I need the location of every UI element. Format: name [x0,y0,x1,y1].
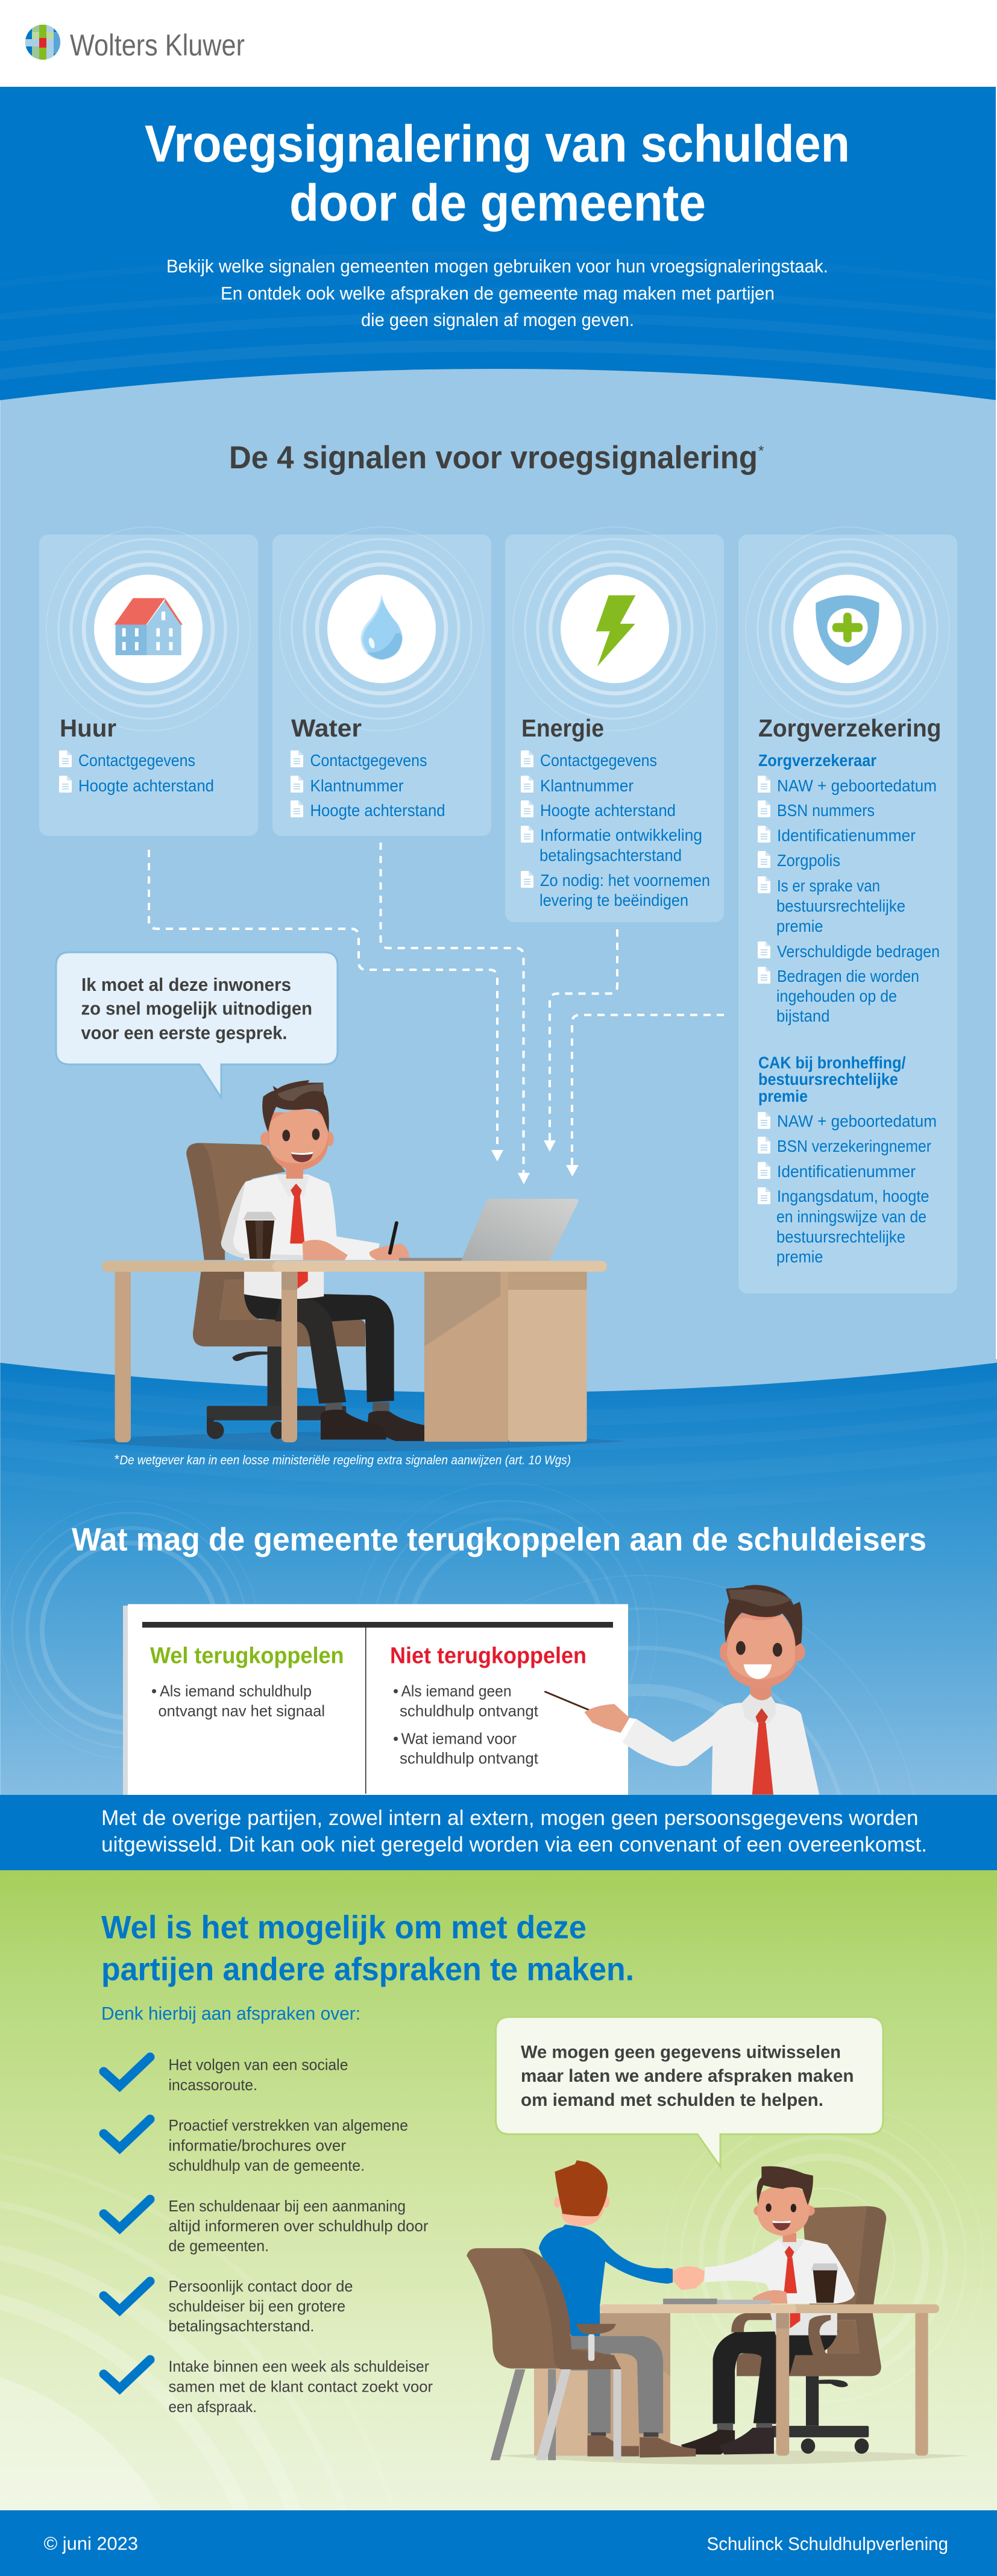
decorative rings green section [0,2100,983,2510]
client chair [467,2248,621,2460]
title [145,115,850,232]
callout: speech bubble inwoners: zo snel mogelijk uitnodigen [81,998,312,1019]
list: zorgverzekeraar: Zorgverzekeraar [758,751,876,770]
item 3 [104,2197,429,2255]
floor shadow [497,2450,969,2464]
column: wel terugkoppelen: ontvangt nav het signaal [158,1702,325,1720]
shirt and tie [221,1174,380,1299]
panel: zorgverzekering [738,527,957,1293]
background: light blue signal area [0,369,997,1392]
callout: speech bubble afspraken: We mogen geen gegevens uitwisselen [521,2042,841,2062]
list: energie items: Informatie ontwikkeling [540,826,702,844]
list: huur items: Contactgegevens [78,751,195,770]
item 4 [104,2277,353,2335]
list: CAK: Identificatienummer [777,1162,916,1181]
column: wel terugkoppelen: Wel terugkoppelen [150,1643,344,1668]
item 5: samen met de klant contact zoekt voor [169,2377,433,2395]
list: zorgverzekeraar: Is er sprake van [777,876,880,895]
column: niet terugkoppelen [390,1643,587,1767]
list: zorgverzekeraar: Bedragen die worden [777,967,919,985]
panel: blue statement band: Met de overige partijen, zowel intern al extern, mogen geen persoonsgegevens worden [101,1806,918,1830]
list: zorgverzekeraar [758,751,940,1025]
list: energie items: Hoogte achterstand [540,801,676,820]
item 2: Proactief verstrekken van algemene [169,2116,408,2134]
decorative rings second section [0,1483,910,1795]
list: water items: Contactgegevens [310,751,427,770]
heading: afspraken: partijen andere afspraken te maken. [101,1952,634,1988]
panel: energie [505,527,724,922]
arrowheads [491,1140,579,1184]
head [720,1585,805,1700]
list: zorgverzekeraar: bijstand [776,1007,829,1025]
item 1: incassoroute. [169,2076,257,2094]
list: huur items [59,750,214,795]
item 1: Het volgen van een sociale [169,2055,348,2073]
list: energie items [521,750,710,909]
list: CAK: bestuursrechtelijke [758,1070,898,1089]
callout: speech bubble afspraken: om iemand met schulden te helpen. [521,2090,823,2110]
list: water items: Klantnummer [310,776,404,795]
heading: afspraken: Wel is het mogelijk om met deze [101,1909,587,1946]
column: niet terugkoppelen: • [393,1730,398,1748]
list: zorgverzekeraar: BSN nummers [777,801,875,820]
list: zorgverzekeraar: ingehouden op de [776,987,897,1005]
list: CAK: premie [758,1087,808,1105]
illustration: desk [102,1261,607,1442]
title: Vroegsignalering van schulden [145,115,850,173]
item 5 [104,2357,433,2416]
list: zorgverzekeraar: Zorgpolis [777,851,840,870]
item 1 [104,2055,348,2094]
list: water items [291,750,445,820]
list: zorgverzekeraar: premie [776,917,823,935]
list: CAK: en inningswijze van de [776,1207,926,1226]
desk top and legs [600,2299,939,2455]
heading: water: Water [291,714,362,742]
item 5: Intake binnen een week als schuldeiser [169,2357,429,2375]
office chair [186,1143,365,1439]
shadow under desk [67,1432,627,1451]
man right head [753,2166,815,2242]
footnote: De wetgever kan in een losse ministeriële regeling extra signalen aanwijzen (art. 10 Wgs) [119,1454,571,1467]
column: wel terugkoppelen [150,1643,344,1720]
list: CAK [758,1054,937,1266]
list: CAK: Ingangsdatum, hoogte [777,1187,929,1205]
heading: terugkoppelen: Wat mag de gemeente terugkoppelen aan de schuldeisers [72,1521,926,1557]
column: niet terugkoppelen: Wat iemand voor [401,1730,517,1748]
logo wordmark: Wolters Kluwer [70,28,245,62]
column: niet terugkoppelen: Niet terugkoppelen [390,1643,587,1668]
title: door de gemeente [289,174,706,232]
list: CAK: CAK bij bronheffing/ [758,1054,906,1072]
list: CAK: NAW + geboortedatum [777,1111,937,1131]
callout: speech bubble inwoners: Ik moet al deze inwoners [81,974,291,995]
subheading: Denk hierbij aan afspraken over: [101,2003,360,2024]
heading: zorgverzekering: Zorgverzekering [758,714,942,742]
callout: speech bubble inwoners [56,952,338,1098]
arrows: dashed signal paths [149,843,724,1173]
item 3: de gemeenten. [169,2237,269,2255]
hands and pen [303,1223,409,1260]
callout: speech bubble afspraken [495,2017,883,2167]
list: energie items: Contactgegevens [540,751,657,770]
footnote: * [114,1453,119,1466]
footer [0,2510,997,2576]
heading: afspraken [101,1909,634,2024]
item 4: betalingsachterstand. [169,2317,315,2335]
callout: speech bubble inwoners: voor een eerste gesprek. [81,1022,287,1043]
intro text [166,256,828,330]
heading: de 4 signalen: De 4 signalen voor vroegsignalering [229,440,758,476]
column: niet terugkoppelen: schuldhulp ontvangt [400,1702,539,1720]
heading: energie: Energie [521,714,604,742]
coffee cup and hand [753,2263,838,2304]
header: logo bar [25,25,245,60]
icon: shield with plus [816,595,879,665]
intro text: die geen signalen af mogen geven. [361,309,634,330]
column: wel terugkoppelen: • [151,1682,157,1700]
panel: whiteboard [123,1604,628,1795]
illustration: laptop [399,1199,579,1261]
list: energie items: Klantnummer [540,776,634,795]
icon: lightning bolt [596,595,635,667]
footer: © juni 2023 [43,2533,138,2554]
illustration: presenter [546,1585,819,1795]
callout: speech bubble afspraken: maar laten we andere afspraken maken [521,2066,854,2086]
column: wel terugkoppelen: Als iemand schuldhulp [160,1682,312,1700]
head [260,1080,334,1179]
illustration: man at desk [186,1080,426,1441]
list: huur items: Hoogte achterstand [78,776,214,795]
man right body [681,2238,855,2454]
item 4: schuldeiser bij een grotere [169,2297,345,2315]
right chair [731,2206,886,2454]
list: water items: Hoogte achterstand [310,801,445,820]
desk block [534,2313,670,2455]
heading: de 4 signalen: * [758,443,764,459]
list: zorgverzekeraar: bestuursrechtelijke [776,897,905,915]
shirt and tie [620,1694,819,1795]
panel: green section background [0,1870,997,2510]
item 4: Persoonlijk contact door de [169,2277,353,2295]
item 2: schuldhulp van de gemeente. [169,2157,365,2175]
trousers and shoes [244,1294,426,1441]
coffee cup [243,1212,276,1259]
panel: blue statement band: uitgewisseld. Dit kan ook niet geregeld worden via een convenant of een overeenkomst. [101,1833,927,1856]
list: CAK: BSN verzekeringnemer [777,1137,931,1155]
list: afspraken met vinkjes [104,2055,433,2416]
column: niet terugkoppelen: • [393,1682,398,1700]
panel: huur [39,527,258,836]
item 3: altijd informeren over schuldhulp door [169,2217,429,2235]
illustration: handshake scene [467,2160,969,2464]
column: niet terugkoppelen: schuldhulp ontvangt [400,1749,539,1767]
panel: blue statement band [0,1795,997,1870]
list: energie items: Zo nodig: het voornemen [540,871,710,890]
list: zorgverzekeraar: NAW + geboortedatum [777,776,937,795]
column: niet terugkoppelen: Als iemand geen [401,1682,511,1700]
icon: house [114,598,183,655]
list: zorgverzekeraar: Verschuldigde bedragen [777,942,940,961]
list: energie items: levering te beëindigen [539,891,688,909]
item 5: een afspraak. [169,2398,257,2416]
heading: huur: Huur [60,714,116,742]
item 2 [104,2116,408,2175]
list: energie items: betalingsachterstand [539,846,682,864]
icon: Wolters Kluwer globe logo [25,25,60,60]
hand and pointer [546,1692,629,1733]
panel: water [272,527,491,836]
list: CAK: premie [776,1248,823,1266]
item 2: informatie/brochures over [169,2136,346,2154]
icon: water drop [360,594,403,660]
background: second blue section gradient [0,1350,997,1795]
client [539,2160,705,2457]
intro text: En ontdek ook welke afspraken de gemeente mag maken met partijen [221,283,775,304]
background: blue header band with waves [0,87,997,424]
list: zorgverzekeraar: Identificatienummer [777,826,916,845]
footer: Schulinck Schuldhulpverlening [706,2533,948,2554]
list: CAK: bestuursrechtelijke [776,1227,905,1246]
item 3: Een schuldenaar bij een aanmaning [169,2197,406,2215]
intro text: Bekijk welke signalen gemeenten mogen gebruiken voor hun vroegsignaleringstaak. [166,256,828,277]
